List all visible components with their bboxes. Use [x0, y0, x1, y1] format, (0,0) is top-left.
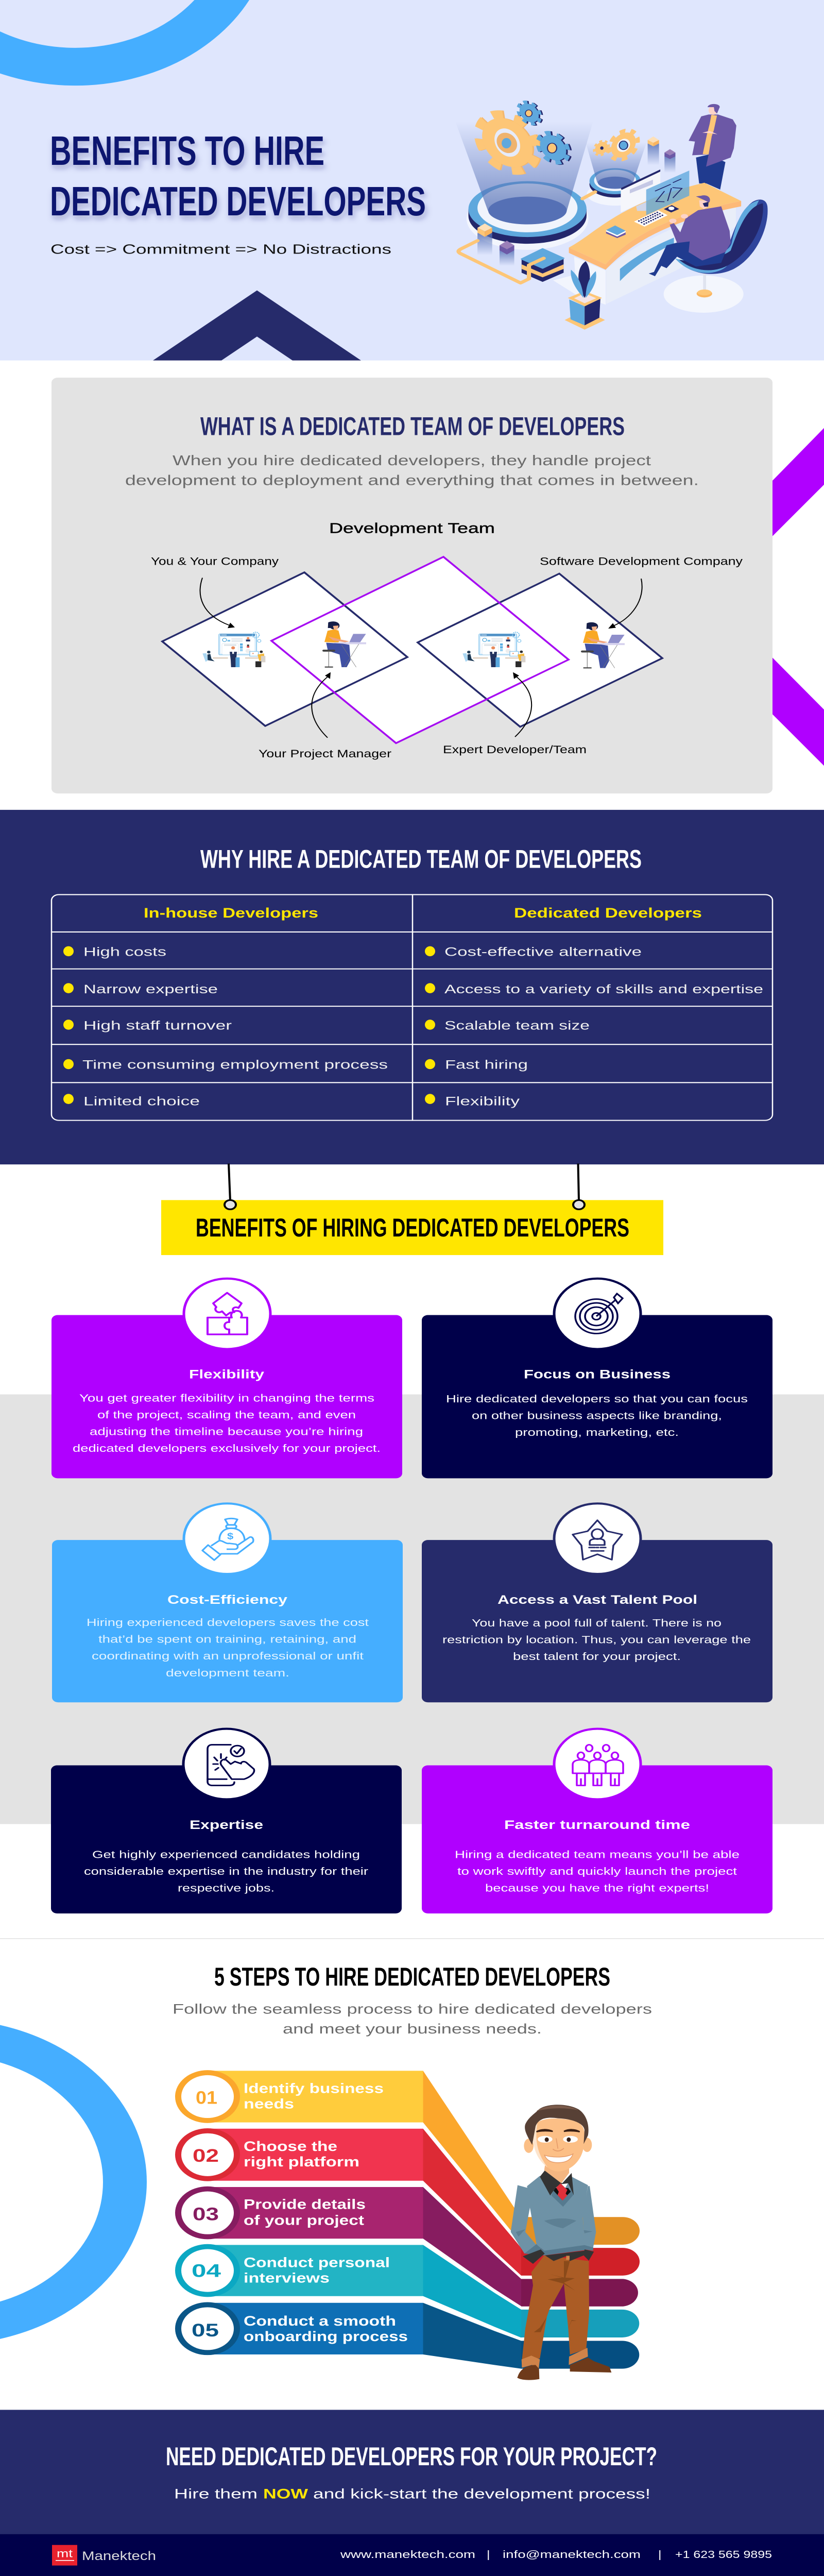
card text: You have a pool full of talent. There is no	[472, 1617, 722, 1629]
computer and monitor	[606, 170, 689, 238]
step 03	[175, 2187, 423, 2239]
steps intro: and meet your business needs.	[283, 2022, 542, 2037]
card title: Access a Vast Talent Pool	[497, 1592, 697, 1606]
card title: Expertise	[190, 1818, 263, 1832]
purple decorative stripes	[767, 428, 824, 766]
in-house column text: High costs	[83, 944, 166, 959]
intro paragraph	[125, 452, 699, 488]
logo: mt	[57, 2548, 73, 2560]
in-house column text	[82, 944, 388, 1108]
card: faster turnaround	[422, 1729, 772, 1913]
step 02	[175, 2128, 423, 2181]
steps intro	[173, 2002, 652, 2037]
ribbons and pills	[423, 2071, 640, 2369]
diagram labels: Your Project Manager	[259, 748, 391, 760]
card: cost-efficiency	[52, 1503, 403, 1702]
dedicated column text: Fast hiring	[445, 1057, 528, 1072]
in-house column text: High staff turnover	[83, 1018, 232, 1032]
column headers: In-house Developers	[144, 906, 318, 921]
icon: company office left	[202, 632, 265, 667]
step 02: 02	[193, 2146, 219, 2166]
diagram: overlapping team squares	[162, 557, 662, 743]
banner: benefits of hiring	[161, 1164, 663, 1255]
decorative blue ring left	[0, 2037, 125, 2327]
icon: project manager	[322, 621, 366, 668]
section: why hire a dedicated team	[0, 810, 824, 1164]
section: call to action	[0, 2410, 824, 2534]
card title: Faster turnaround time	[504, 1818, 690, 1832]
cta text: NOW	[263, 2486, 308, 2502]
panel: what is a dedicated team	[52, 378, 772, 793]
step 01: needs	[244, 2096, 294, 2112]
hero illustration: isometric developers at desk	[455, 99, 768, 330]
step 04	[175, 2244, 423, 2297]
section: 5 steps	[0, 1962, 652, 2380]
step 01: Identify business	[244, 2081, 384, 2096]
icon: money bag in hand	[202, 1518, 253, 1560]
icon: team of people	[573, 1745, 623, 1786]
icon: money bag in hand: $	[227, 1531, 233, 1541]
in-house column text: Narrow expertise	[83, 982, 218, 996]
card text: restriction by location. Thus, you can leverage the	[442, 1634, 751, 1646]
contact details: |	[658, 2548, 661, 2560]
contact details: info@manektech.com	[503, 2548, 641, 2560]
card text: adjusting the timeline because you’re hiring	[90, 1426, 363, 1437]
icon: phone with tap	[208, 1745, 254, 1786]
card title: Cost-Efficiency	[167, 1592, 288, 1606]
diagram title: Development Team	[329, 520, 495, 536]
card text: on other business aspects like branding,	[472, 1410, 722, 1421]
step 04: interviews	[244, 2270, 330, 2286]
column headers	[144, 906, 702, 921]
dedicated column text	[444, 944, 763, 1108]
card text: dedicated developers exclusively for your project.	[73, 1442, 381, 1454]
step 03: of your project	[244, 2213, 364, 2228]
navy chevron	[153, 291, 361, 361]
diagram labels	[151, 555, 743, 760]
card title: Focus on Business	[524, 1367, 671, 1381]
icon: star profile	[573, 1520, 622, 1560]
card: talent pool	[422, 1503, 772, 1702]
floating cubes	[477, 137, 675, 266]
contact details: www.manektech.com	[340, 2548, 475, 2560]
card text: Hire dedicated developers so that you can focus	[446, 1393, 748, 1404]
arrow: you and your company	[200, 578, 235, 628]
cta text	[174, 2486, 650, 2502]
row bullets	[63, 946, 435, 1104]
diagram labels: Software Development Company	[540, 555, 743, 568]
step 05: 05	[192, 2321, 219, 2341]
steps intro: Follow the seamless process to hire dedicated developers	[173, 2002, 652, 2017]
in-house column text: Limited choice	[83, 1094, 200, 1108]
card text: respective jobs.	[178, 1882, 274, 1894]
gears	[467, 99, 643, 177]
step 01: 01	[196, 2088, 217, 2108]
card text	[455, 1849, 740, 1894]
card text	[84, 1849, 368, 1894]
logo: Manektech	[82, 2549, 156, 2563]
seated developer on chair	[649, 195, 768, 297]
step 05: onboarding process	[244, 2329, 408, 2344]
server stack	[458, 241, 563, 283]
card: focus on business	[422, 1279, 772, 1478]
dedicated column text: Scalable team size	[444, 1018, 590, 1032]
contact details	[340, 2548, 772, 2560]
arrow: expert developer	[513, 672, 531, 737]
card text: development team.	[166, 1667, 289, 1679]
logo	[52, 2545, 156, 2566]
card text	[446, 1393, 748, 1438]
card text: that’d be spent on training, retaining, and	[98, 1633, 356, 1645]
card text: to work swiftly and quickly launch the project	[457, 1865, 737, 1877]
dedicated column text: Access to a variety of skills and expertise	[444, 982, 763, 996]
standing man	[689, 104, 736, 190]
hero title: BENEFITS TO HIRE	[50, 128, 324, 174]
card text: of the project, scaling the team, and even	[97, 1409, 356, 1420]
card text: coordinating with an unprofessional or unfit	[92, 1650, 364, 1662]
potted plant	[564, 261, 605, 330]
diagram labels: Expert Developer/Team	[443, 744, 587, 756]
intro paragraph: When you hire dedicated developers, they handle project	[173, 452, 651, 468]
step 05	[175, 2302, 423, 2355]
card text: promoting, marketing, etc.	[515, 1426, 679, 1438]
arrow: software company	[608, 579, 642, 629]
in-house column text: Time consuming employment process	[82, 1057, 388, 1072]
card text	[442, 1617, 751, 1662]
arrow: project manager	[312, 672, 331, 738]
card text: Hiring experienced developers saves the cost	[87, 1616, 369, 1629]
intro paragraph: development to deployment and everything that comes in between.	[125, 472, 699, 488]
hero section	[0, 0, 824, 361]
step 04: Conduct personal	[244, 2255, 390, 2270]
step 02: Choose the	[244, 2139, 337, 2154]
step 03: Provide details	[244, 2197, 366, 2212]
card title: Flexibility	[189, 1367, 265, 1381]
card text: Hiring a dedicated team means you’ll be able	[455, 1849, 740, 1860]
card text: You get greater flexibility in changing the terms	[79, 1392, 374, 1404]
step 02: right platform	[244, 2155, 359, 2170]
step 03: 03	[193, 2205, 219, 2224]
decorative blue ring	[0, 0, 249, 66]
icon: developer	[581, 622, 625, 668]
step 05: Conduct a smooth	[244, 2314, 396, 2329]
card: flexibility	[52, 1279, 402, 1478]
cta text: Hire them	[174, 2486, 258, 2502]
hero subtitle: Cost => Commitment => No Distractions	[50, 242, 391, 257]
hero title: DEDICATED DEVELOPERS	[50, 178, 426, 224]
desk	[569, 183, 741, 305]
step 04: 04	[192, 2261, 221, 2281]
hero title	[50, 128, 426, 224]
diagram labels: You & Your Company	[151, 555, 279, 568]
dedicated column text: Cost-effective alternative	[444, 944, 642, 959]
comparison table	[52, 894, 772, 1121]
icon: puzzle pieces	[208, 1293, 247, 1334]
card text: Get highly experienced candidates holding	[92, 1849, 360, 1860]
card text: because you have the right experts!	[485, 1882, 709, 1894]
footer	[0, 2534, 824, 2576]
card text: best talent for your project.	[513, 1650, 681, 1662]
card: expertise	[51, 1729, 402, 1913]
gray band behind benefit cards	[0, 1394, 824, 1824]
contact details: +1 623 565 9895	[675, 2548, 772, 2560]
dedicated column text: Flexibility	[445, 1094, 520, 1108]
card text	[87, 1616, 369, 1679]
card text: considerable expertise in the industry for their	[84, 1865, 368, 1877]
cta text: and kick-start the development process!	[313, 2486, 650, 2502]
step 01	[175, 2070, 423, 2123]
character: smiling man	[511, 2105, 611, 2380]
contact details: |	[487, 2548, 490, 2560]
column headers: Dedicated Developers	[514, 906, 702, 921]
icon: company office right	[462, 632, 525, 667]
card text	[73, 1392, 381, 1454]
icon: target	[575, 1294, 623, 1333]
